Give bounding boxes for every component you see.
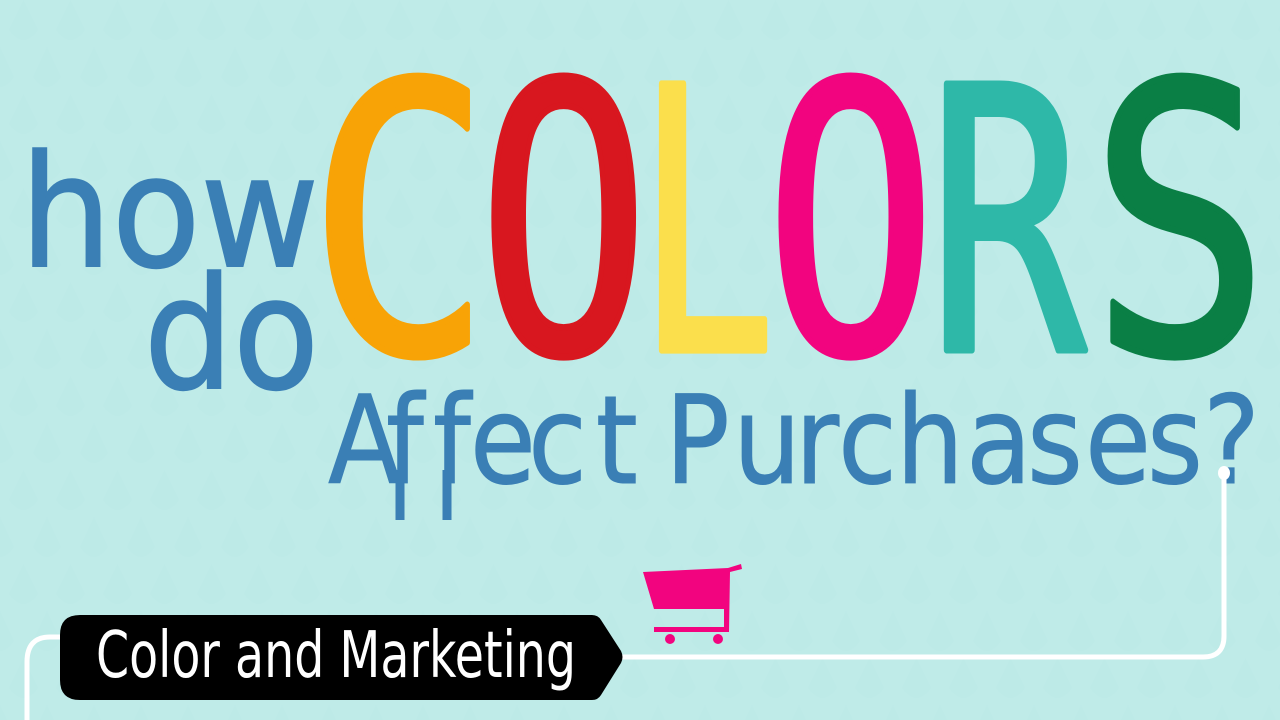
connector line: question mark to banner: [620, 466, 1230, 657]
icon: shopping cart: [643, 564, 742, 644]
connector line: banner to next section: [27, 637, 62, 720]
title: how do: [20, 122, 319, 425]
title: COLORS: O: [478, 8, 650, 441]
title: COLORS: R: [928, 11, 1088, 436]
title: COLORS: S: [1090, 8, 1269, 440]
title: how do: do: [144, 244, 319, 425]
title: Affect Purchases?: Affect Purchases?: [328, 370, 1260, 513]
title: COLORS: [308, 8, 1269, 441]
banner: Color and Marketing: Color and Marketing: [96, 619, 576, 693]
title: how do: how: [20, 122, 319, 303]
banner: Color and Marketing: [60, 615, 622, 700]
title: COLORS: O: [765, 8, 937, 441]
title: COLORS: L: [637, 11, 775, 436]
title: COLORS: C: [308, 8, 491, 441]
